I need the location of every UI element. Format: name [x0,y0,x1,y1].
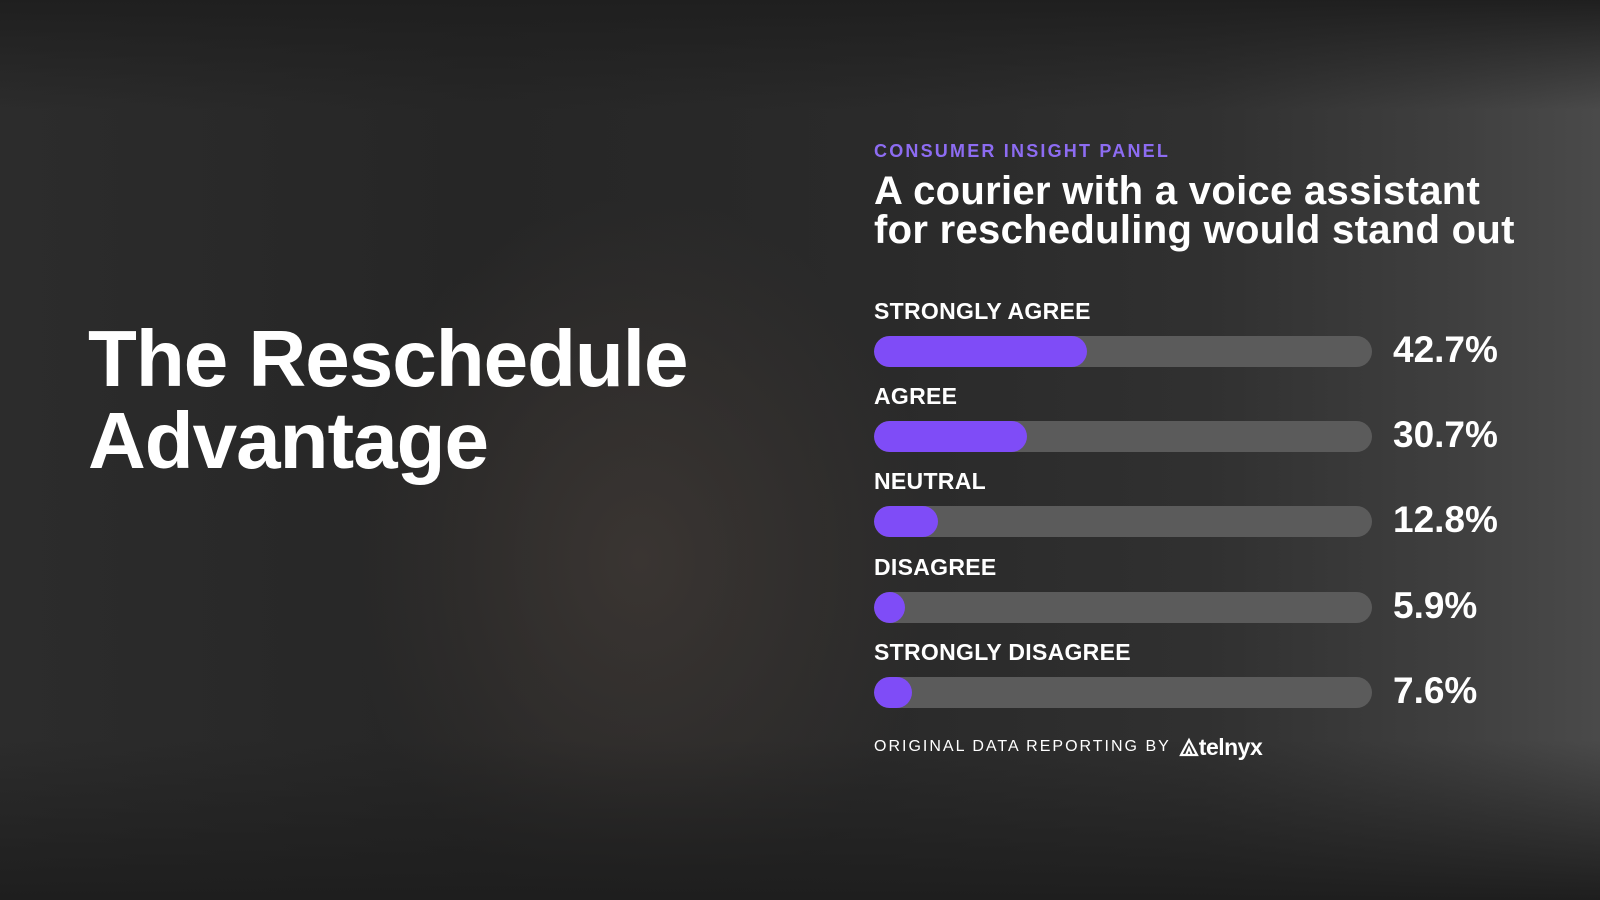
row: neutral: NEUTRAL [874,468,986,494]
bar chart [874,298,1498,711]
heading: A courier with a voice assistant [874,169,1480,213]
row: agree: 30.7% [1393,414,1498,455]
heading [874,169,1515,252]
row: disagree [874,554,1477,626]
background: lower dashboard [0,740,1600,900]
eyebrow: CONSUMER INSIGHT PANEL [874,141,1170,161]
row: strongly disagree: STRONGLY DISAGREE [874,639,1131,665]
row: strongly agree [874,298,1498,370]
footer credit: ORIGINAL DATA REPORTING BY [874,738,1171,755]
heading: for rescheduling would stand out [874,208,1515,252]
title: Advantage [88,396,488,485]
row: strongly disagree [874,639,1477,711]
logo: telnyx: telnyx [1199,734,1262,760]
row: disagree: 5.9% [1393,585,1477,626]
background: windshield frame [0,0,1600,110]
row: strongly agree: STRONGLY AGREE [874,298,1091,324]
row: neutral [874,468,1498,540]
title: The Reschedule [88,314,688,403]
title [88,314,688,485]
row: strongly disagree: 7.6% [1393,670,1477,711]
row: neutral: 12.8% [1393,499,1498,540]
footer credit [874,734,1263,760]
row: agree: AGREE [874,383,957,409]
row: disagree: DISAGREE [874,554,997,580]
row: agree [874,383,1498,455]
row: strongly agree: 42.7% [1393,329,1498,370]
